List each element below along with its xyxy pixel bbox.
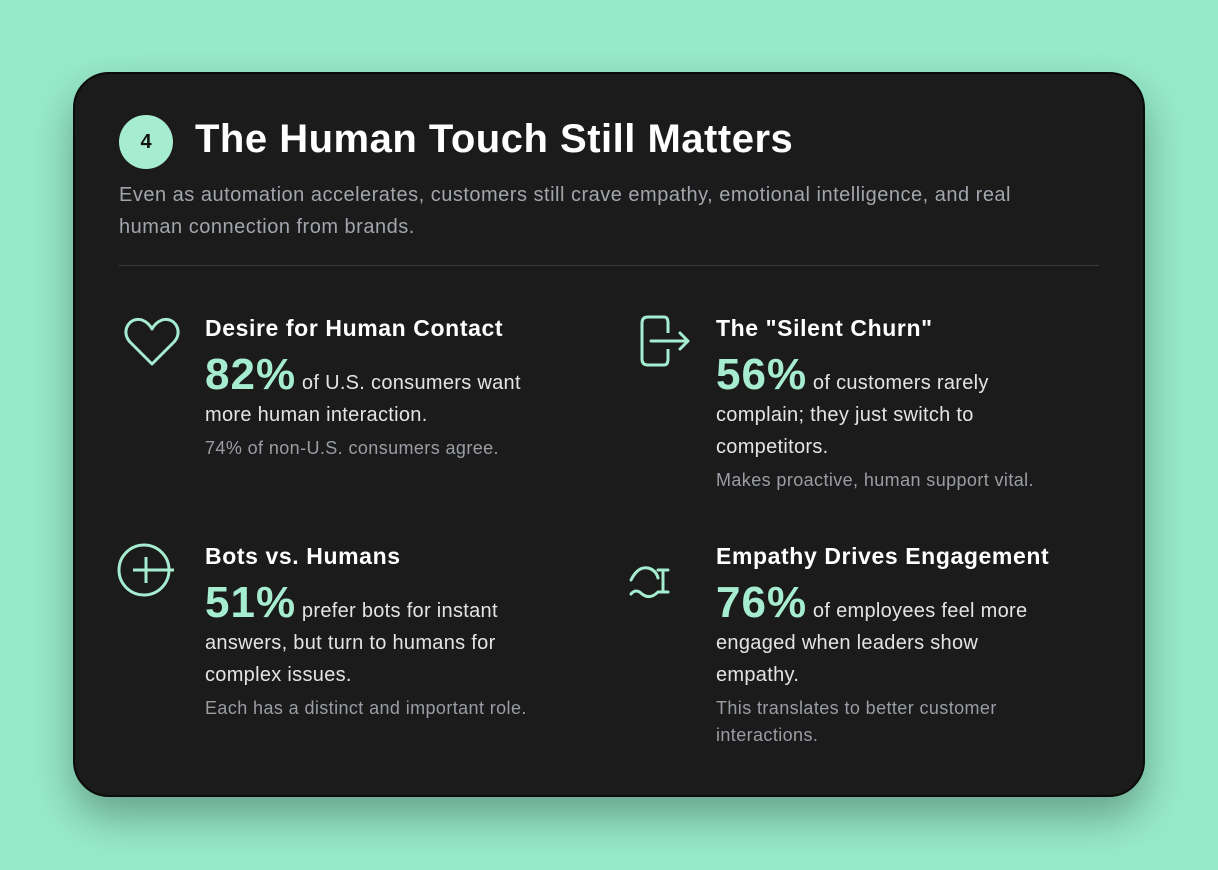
item: bots vs humans — [205, 543, 527, 718]
item: desire for human contact: 74% of non-U.S. consumers agree. — [205, 438, 499, 458]
item: silent churn: Makes proactive, human support vital. — [716, 470, 1034, 490]
item: bots vs humans: Bots vs. Humans — [205, 543, 401, 569]
item: silent churn: The "Silent Churn" — [716, 315, 933, 341]
item: empathy drives engagement: 76% of employees feel more engaged when leaders show empathy. — [716, 578, 1027, 686]
icon: exit door — [640, 316, 690, 366]
badge: number 4 — [119, 115, 173, 169]
badge: number 4: 4 — [140, 131, 152, 153]
item: desire for human contact — [205, 315, 521, 458]
item: desire for human contact: 82% of U.S. consumers want more human interaction. — [205, 350, 521, 426]
icon: circle plus — [118, 544, 174, 596]
item: empathy drives engagement: This translates to better customer interactions. — [716, 698, 997, 745]
item: empathy drives engagement — [716, 543, 1049, 745]
item: bots vs humans: 51% prefer bots for instant answers, but turn to humans for complex issues. — [205, 578, 498, 686]
icon: handshake — [629, 566, 670, 598]
subtitle: Even as automation accelerates, customers still crave empathy, emotional intelligence, and real human connection from brands. — [119, 184, 1011, 238]
icon: heart — [124, 318, 180, 366]
item: bots vs humans: Each has a distinct and important role. — [205, 698, 527, 718]
item: desire for human contact: Desire for Human Contact — [205, 315, 503, 341]
card — [73, 72, 1145, 797]
title: The Human Touch Still Matters — [195, 117, 793, 161]
item: empathy drives engagement: Empathy Drives Engagement — [716, 543, 1049, 569]
item: silent churn: 56% of customers rarely complain; they just switch to competitors. — [716, 350, 989, 458]
item: silent churn — [716, 315, 1034, 490]
